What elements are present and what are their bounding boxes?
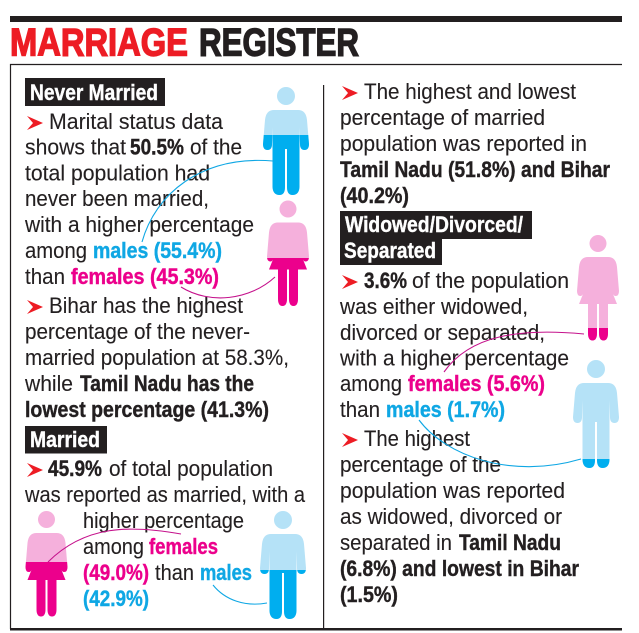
text block: marital status: never been married,	[25, 186, 209, 211]
icon: male widowed	[573, 360, 619, 468]
text block: bihar highest	[24, 293, 289, 422]
text block: highest widowed: as widowed, divorced or	[340, 504, 562, 529]
text block: widowed share: 3.6%	[364, 268, 407, 293]
title	[10, 16, 622, 64]
connector: males	[419, 420, 581, 467]
connector: females	[48, 529, 181, 562]
icon: female never married	[267, 200, 309, 306]
text block: widowed share: females (5.6%)	[408, 371, 545, 396]
icon: male married	[260, 511, 306, 619]
text block: bihar highest: while	[24, 371, 73, 396]
text block: highest and lowest married	[340, 79, 610, 208]
title: MARRIAGE	[10, 22, 188, 64]
icon: male never married	[263, 87, 309, 195]
text block: marital status: Marital status data	[49, 109, 223, 134]
text block: married share: 45.9%	[48, 456, 102, 481]
arrow bullet	[27, 300, 43, 314]
text block: marital status	[24, 109, 254, 289]
text block: marital status: with a higher percentage	[24, 212, 254, 237]
text block: highest widowed: Tamil Nadu	[459, 530, 561, 555]
heading: widowed divorced separated: Widowed/Divorced/	[345, 212, 524, 237]
text block: highest widowed: separated in	[340, 530, 452, 555]
icon: female married	[26, 511, 68, 616]
text block: widowed share: was either widowed,	[339, 294, 528, 319]
text block: married share: (49.0%)	[83, 560, 149, 585]
text block: widowed share: than	[340, 397, 380, 422]
text block: highest widowed: (1.5%)	[340, 582, 398, 607]
text block: highest widowed: The highest	[364, 426, 471, 451]
text block: widowed share	[339, 268, 569, 422]
text block: bihar highest: percentage of the never-	[25, 319, 250, 344]
heading: never married: Never Married	[30, 80, 158, 105]
text block: married share: males	[200, 560, 252, 585]
arrow bullet	[27, 116, 43, 130]
connector: males	[142, 160, 273, 242]
text block: married share: among	[83, 534, 144, 559]
arrow bullet	[342, 275, 358, 289]
text block: marital status: of the	[190, 134, 242, 160]
connector: females	[444, 332, 584, 372]
text block: highest widowed: (6.8%) and lowest in Bihar	[340, 556, 579, 581]
text block: highest and lowest married: (40.2%)	[340, 183, 409, 208]
icon: female widowed	[577, 235, 619, 340]
text block: widowed share: among	[340, 371, 402, 396]
text block: highest and lowest married: population was reported in	[340, 131, 587, 156]
heading: widowed divorced separated: Separated	[344, 238, 436, 263]
text block: married share: females	[149, 534, 218, 559]
text block: widowed share: with a higher percentage	[339, 346, 569, 370]
text block: bihar highest: married population at 58.3%,	[25, 345, 289, 370]
text block: bihar highest: Tamil Nadu has the	[80, 371, 254, 396]
text block: married share: than	[155, 560, 194, 585]
text block: highest widowed: population was reported	[340, 478, 565, 503]
panel: never married	[24, 78, 309, 422]
text block: highest widowed	[340, 426, 579, 607]
text block: married share: (42.9%)	[83, 586, 149, 611]
text block: marital status: females (45.3%)	[71, 264, 219, 289]
arrow bullet	[342, 86, 358, 100]
connector: females	[181, 277, 275, 298]
panel: married	[24, 426, 306, 619]
text block: marital status: males (55.4%)	[93, 238, 222, 263]
heading: married: Married	[30, 427, 100, 452]
text block: marital status: total population had	[25, 160, 210, 186]
text block: married share	[24, 456, 305, 611]
text block: highest and lowest married: The highest and lowest	[364, 79, 577, 104]
text block: marital status: among	[25, 238, 87, 263]
text block: marital status: shows that	[25, 134, 127, 160]
connector: males	[213, 585, 267, 604]
text block: widowed share: of the population	[412, 268, 569, 293]
text block: highest and lowest married: percentage of married	[340, 105, 545, 130]
text block: married share: of total population	[109, 456, 273, 481]
heading: widowed divorced separated	[340, 211, 532, 265]
text block: bihar highest: Bihar has the highest	[49, 293, 244, 318]
text block: marital status: 50.5%	[130, 134, 184, 160]
arrow bullet	[342, 433, 358, 447]
arrow bullet	[27, 463, 43, 477]
text block: bihar highest: lowest percentage (41.3%)	[25, 397, 269, 422]
text block: widowed share: males (1.7%)	[386, 397, 505, 422]
text block: married share: was reported as married, with a	[24, 482, 305, 507]
text block: marital status: than	[25, 264, 65, 289]
text block: highest widowed: percentage of the	[340, 452, 501, 477]
panel: widowed divorced separated	[339, 211, 619, 607]
text block: widowed share: divorced or separated,	[340, 320, 545, 345]
title: REGISTER	[199, 22, 359, 64]
text block: married share: higher percentage	[83, 508, 244, 533]
